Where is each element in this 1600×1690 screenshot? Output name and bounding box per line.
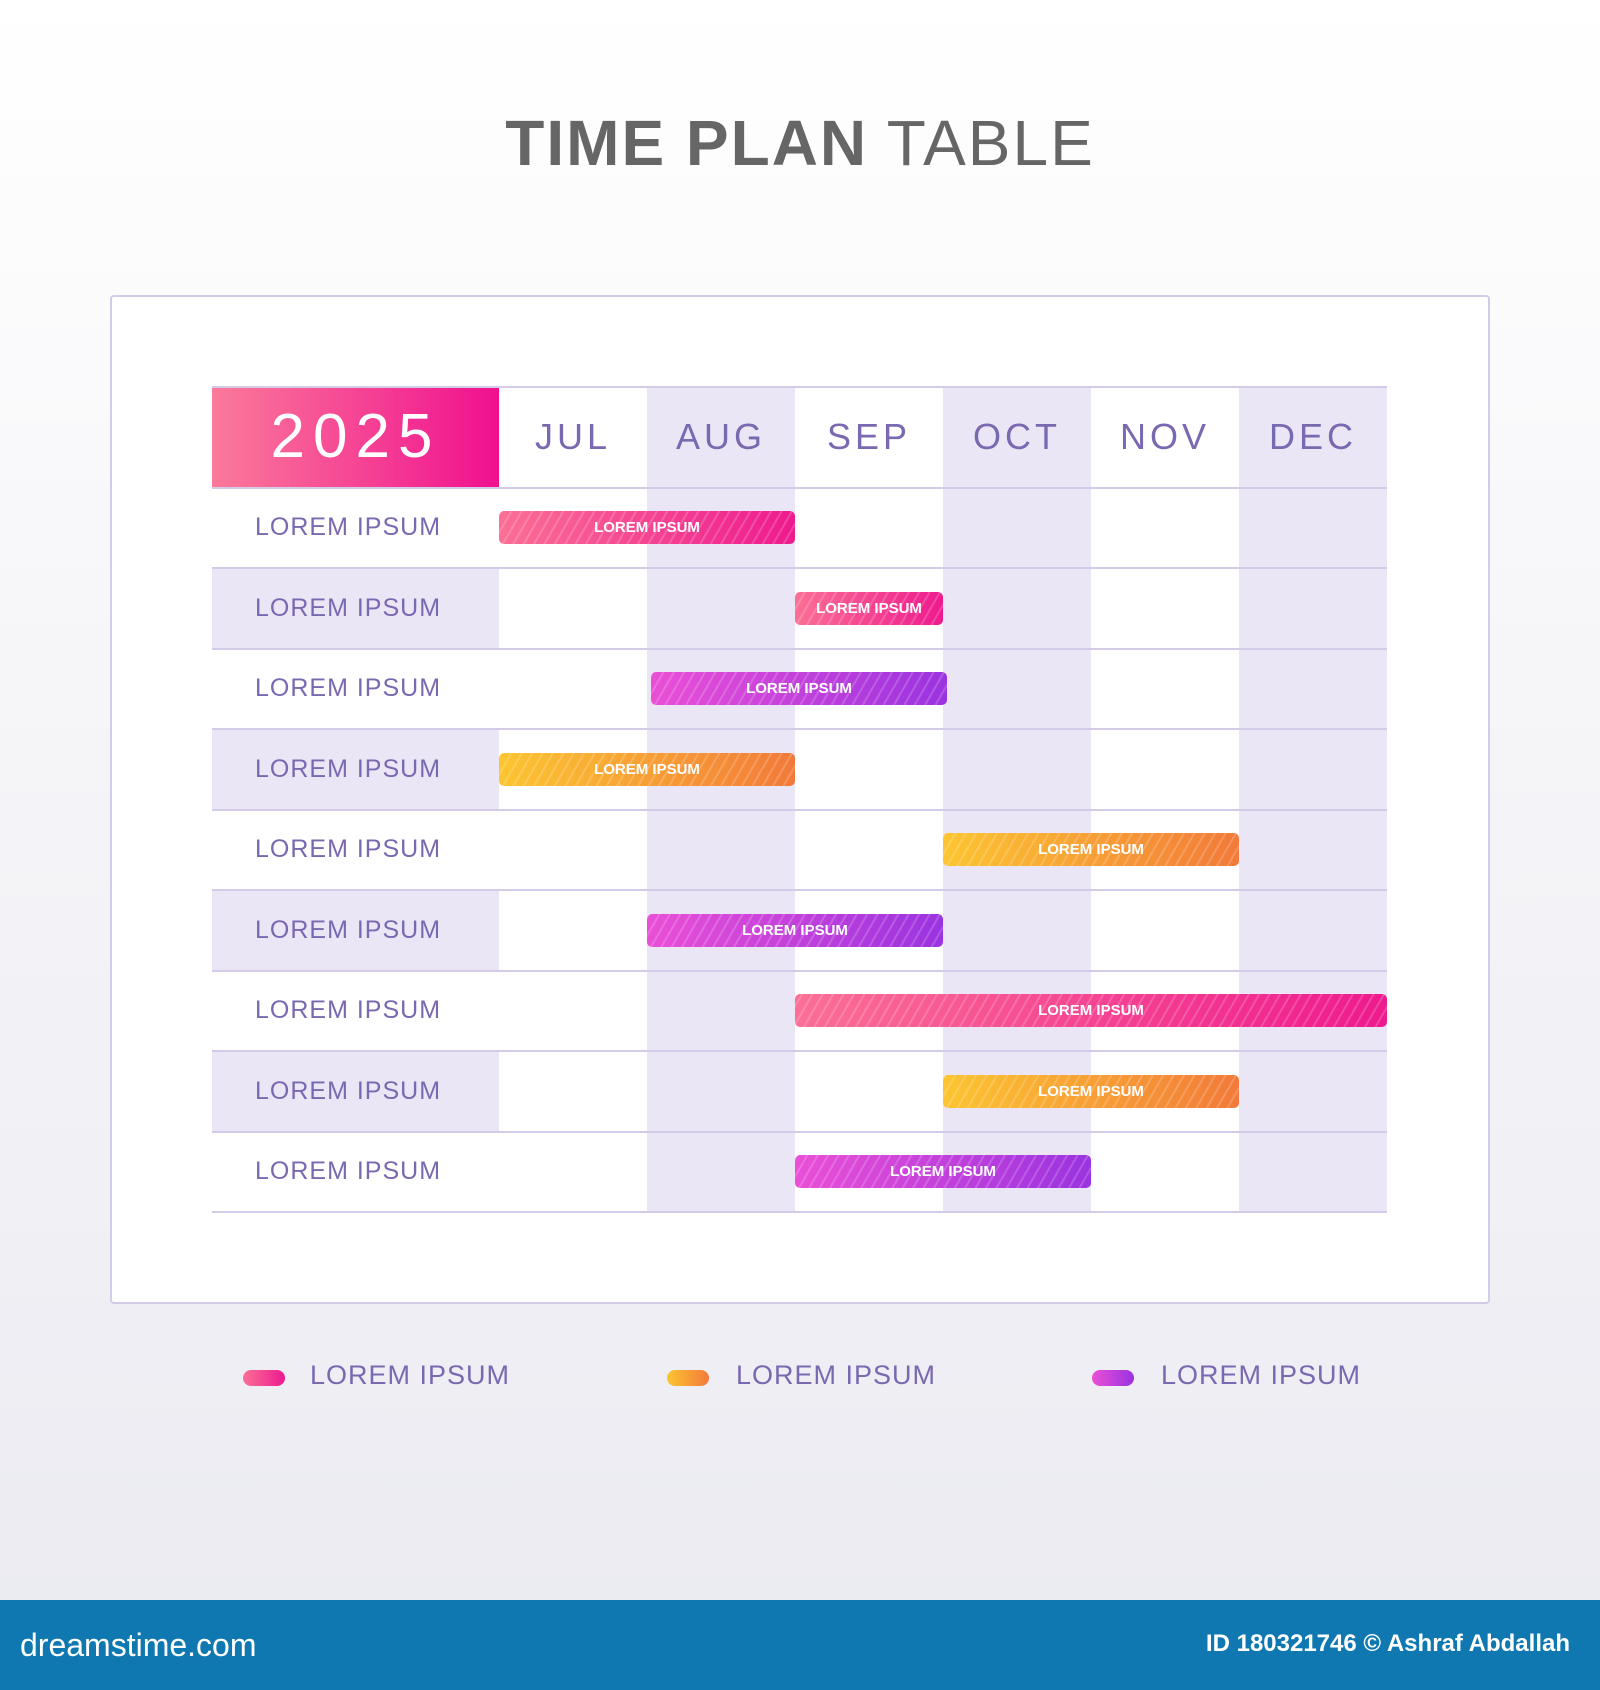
bar 8 bbox=[943, 1075, 1239, 1108]
legend: LOREM IPSUM bbox=[310, 1360, 510, 1390]
bar 3: LOREM IPSUM bbox=[746, 680, 852, 697]
bar 9: LOREM IPSUM bbox=[890, 1163, 996, 1180]
legend bbox=[243, 1360, 1361, 1390]
footer bbox=[0, 1600, 1600, 1690]
bar 2: LOREM IPSUM bbox=[816, 600, 922, 617]
bar 1 bbox=[499, 511, 795, 544]
bar 5 bbox=[943, 833, 1239, 866]
shaded column DEC bbox=[1239, 387, 1387, 1212]
bar 7: LOREM IPSUM bbox=[1038, 1002, 1144, 1019]
year header bbox=[212, 387, 499, 487]
row labels: LOREM IPSUM bbox=[255, 1157, 441, 1185]
row labels: LOREM IPSUM bbox=[255, 835, 441, 863]
shaded column OCT bbox=[943, 387, 1091, 1212]
month headers: JUL bbox=[535, 416, 611, 457]
bar 9 bbox=[795, 1155, 1091, 1188]
bar 5: LOREM IPSUM bbox=[1038, 841, 1144, 858]
row labels bbox=[255, 513, 441, 1185]
legend: LOREM IPSUM bbox=[1161, 1360, 1361, 1390]
bar 4 bbox=[499, 753, 795, 786]
row labels: LOREM IPSUM bbox=[255, 996, 441, 1024]
month headers bbox=[535, 416, 1357, 457]
bar 6: LOREM IPSUM bbox=[742, 922, 848, 939]
bar 2 bbox=[795, 592, 943, 625]
bar 7 bbox=[795, 994, 1387, 1027]
shaded column AUG bbox=[647, 387, 795, 1212]
title: TIME PLAN TABLE bbox=[505, 107, 1095, 179]
row labels: LOREM IPSUM bbox=[255, 1077, 441, 1105]
footer: dreamstime.com bbox=[20, 1627, 256, 1663]
row labels: LOREM IPSUM bbox=[255, 755, 441, 783]
month headers: OCT bbox=[973, 416, 1061, 457]
bar 3 bbox=[651, 672, 947, 705]
panel: table card bbox=[110, 295, 1490, 1304]
footer: ID 180321746 © Ashraf Abdallah bbox=[1206, 1630, 1570, 1657]
row labels: LOREM IPSUM bbox=[255, 513, 441, 541]
month headers: DEC bbox=[1269, 416, 1357, 457]
month headers: AUG bbox=[676, 416, 766, 457]
bar 1: LOREM IPSUM bbox=[594, 519, 700, 536]
legend: LOREM IPSUM bbox=[736, 1360, 936, 1390]
bar 6 bbox=[647, 914, 943, 947]
month headers: NOV bbox=[1120, 416, 1210, 457]
row labels: LOREM IPSUM bbox=[255, 594, 441, 622]
row labels: LOREM IPSUM bbox=[255, 916, 441, 944]
bar 4: LOREM IPSUM bbox=[594, 761, 700, 778]
row labels: LOREM IPSUM bbox=[255, 674, 441, 702]
month headers: SEP bbox=[827, 416, 911, 457]
bar 8: LOREM IPSUM bbox=[1038, 1083, 1144, 1100]
year header: 2025 bbox=[271, 402, 440, 471]
